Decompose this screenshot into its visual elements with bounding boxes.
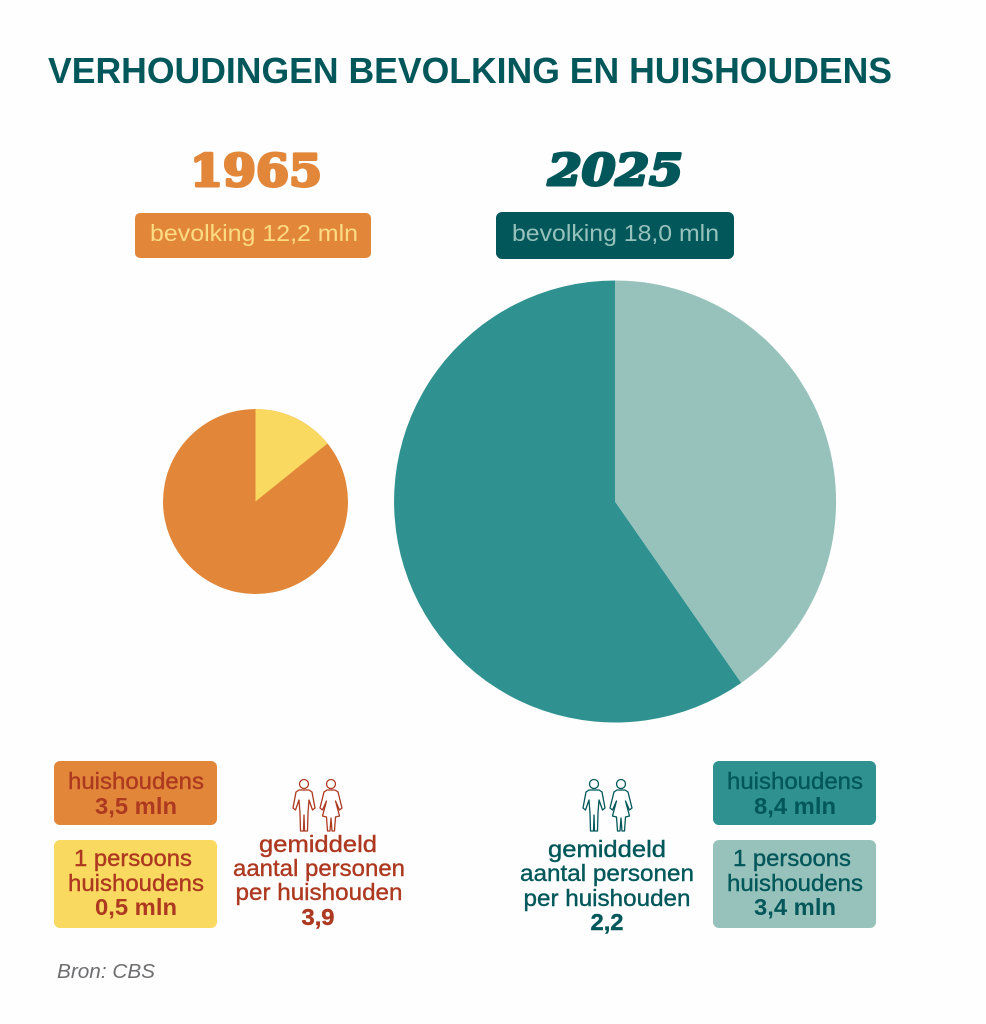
year heading 2025: 2025 xyxy=(547,146,683,196)
box: huishoudens 2025: 8,4 mln xyxy=(754,793,836,819)
box: huishoudens 1965: huishoudens xyxy=(68,768,204,794)
text: gemiddeld aantal personen 2025: 2,2 xyxy=(590,909,624,935)
text: gemiddeld aantal personen 2025: per huishouden xyxy=(524,885,690,911)
text: gemiddeld aantal personen 2025 xyxy=(520,836,694,935)
box: huishoudens 2025: huishoudens xyxy=(727,768,863,794)
text: gemiddeld aantal personen 1965: gemiddeld xyxy=(259,831,377,857)
label: bevolking 1965: bevolking 12,2 mln xyxy=(150,220,358,246)
box: 1 persoons huishoudens 1965: 0,5 mln xyxy=(95,894,177,920)
box: huishoudens 1965 xyxy=(54,761,217,825)
box: 1 persoons huishoudens 1965: 1 persoons xyxy=(74,845,192,871)
box: huishoudens 2025 xyxy=(713,761,876,825)
title: VERHOUDINGEN BEVOLKING EN HUISHOUDENS xyxy=(48,50,892,91)
year heading 1965: 1965 xyxy=(190,146,322,197)
box: 1 persoons huishoudens 1965: huishoudens xyxy=(68,870,204,896)
text: gemiddeld aantal personen 2025: gemiddeld xyxy=(548,836,666,862)
icon: people 1965 xyxy=(293,780,342,831)
label: bevolking 2025 xyxy=(496,212,734,259)
icon: people 2025 xyxy=(583,780,632,831)
label: bevolking 1965 xyxy=(135,213,371,258)
box: 1 persoons huishoudens 2025: huishoudens xyxy=(727,870,863,896)
source note: Bron: CBS xyxy=(57,961,156,983)
box: 1 persoons huishoudens 1965 xyxy=(54,840,217,928)
pie chart 2025 xyxy=(394,280,836,722)
box: huishoudens 1965: 3,5 mln xyxy=(95,793,177,819)
text: gemiddeld aantal personen 2025: aantal personen xyxy=(520,860,694,886)
box: 1 persoons huishoudens 2025: 3,4 mln xyxy=(754,894,836,920)
text: gemiddeld aantal personen 1965: aantal personen xyxy=(233,855,405,881)
text: gemiddeld aantal personen 1965: per huishouden xyxy=(236,879,402,905)
text: gemiddeld aantal personen 1965 xyxy=(233,831,405,930)
box: 1 persoons huishoudens 2025: 1 persoons xyxy=(733,845,851,871)
label: bevolking 2025: bevolking 18,0 mln xyxy=(512,220,719,246)
box: 1 persoons huishoudens 2025 xyxy=(713,840,876,928)
text: gemiddeld aantal personen 1965: 3,9 xyxy=(302,904,334,930)
pie chart 1965 xyxy=(163,409,348,594)
